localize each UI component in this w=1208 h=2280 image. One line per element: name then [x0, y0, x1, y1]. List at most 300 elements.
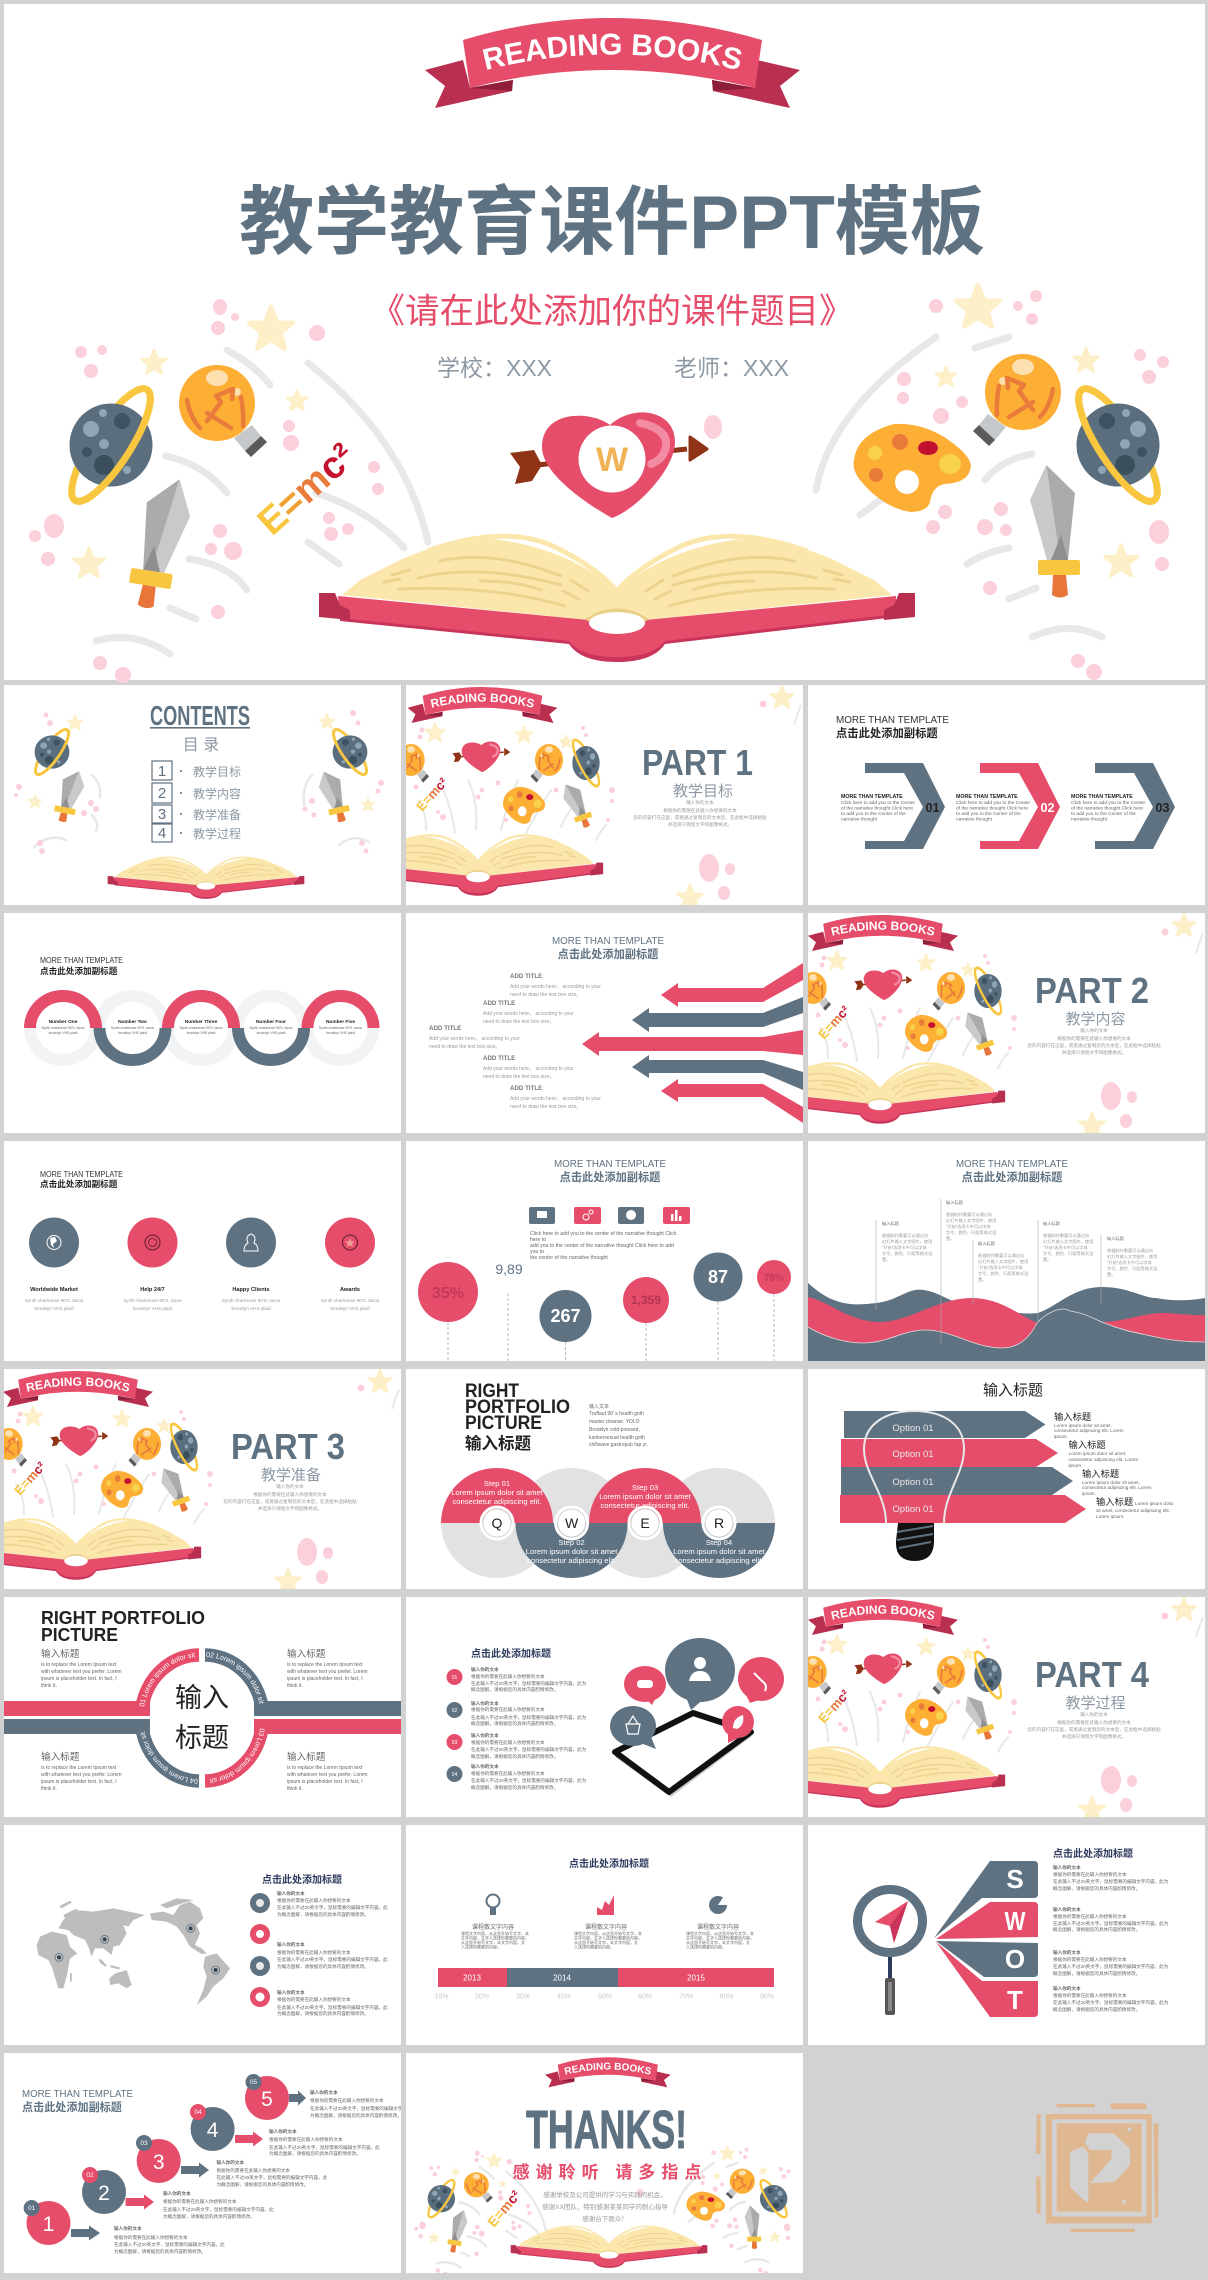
heading	[465, 1381, 570, 1453]
text block: bottom right: with whatever text you prefer. Lorem	[287, 1772, 368, 1778]
step text: 根据你的需要在此输入你想要的文本	[163, 2198, 237, 2205]
text block 2	[1068, 1439, 1138, 1468]
text block: Click here to add you to the center of the narrative thought Click	[530, 1231, 677, 1237]
ring labels: Number Three	[185, 1019, 218, 1025]
step text: 在此输入不过20英文字，鼠标需要的编辑文字内容。此	[114, 2241, 225, 2248]
heading: MORE THAN TEMPLATE	[40, 1170, 123, 1179]
step 1	[24, 2200, 100, 2245]
text block: bottom right: is to replace the Lorem Ipsum text	[287, 1765, 363, 1771]
letter badges	[481, 1507, 735, 1539]
letter badges: W	[565, 1515, 579, 1531]
text block 1	[882, 1220, 933, 1263]
SWOT wedge S	[934, 1861, 1038, 1938]
center title	[175, 1683, 229, 1753]
icon: book illustration	[353, 686, 801, 909]
text block: 输入文本	[589, 1403, 609, 1410]
text block 4: 置。	[1043, 1257, 1051, 1263]
text block 2: “开始”选项卡中可以字体	[946, 1223, 991, 1230]
heading: 点击此处添加副标题	[962, 1170, 1062, 1184]
labels: Happy Clients	[232, 1287, 270, 1293]
step text: 在此输入不过20英文字，鼠标需要的编辑文字内容。此	[216, 2174, 328, 2181]
heading: MORE THAN TEMPLATE	[22, 2088, 133, 2100]
ring labels: brooklyn VHS plaid	[257, 1031, 286, 1035]
arrows	[582, 963, 803, 1123]
text block	[1027, 1027, 1161, 1056]
heading: part 2: PART 2	[1035, 970, 1149, 1011]
text block: chillwave gastropub fap yr.	[589, 1442, 648, 1448]
list text: 在此输入不过20英文字，鼠标需要的编辑文字内容。此为	[1053, 1878, 1169, 1885]
ring labels: brooklyn VHS plaid	[118, 1031, 147, 1035]
text block: 输入你的文本	[686, 799, 714, 806]
list text: 根据你的需要在此输入你想要的文本	[1053, 1992, 1127, 1999]
heading: 点击此处添加副标题	[40, 1178, 118, 1189]
chevron 01: 01	[926, 800, 940, 815]
list: contents items: 3	[158, 806, 166, 823]
heading	[40, 1170, 123, 1189]
list badges: 01	[452, 1675, 457, 1681]
text block 3: 置。	[978, 1277, 986, 1283]
list text: 概念图解，请根据您的具体内容酌情修改。	[471, 1753, 558, 1760]
balloon: 35%	[418, 1262, 478, 1322]
icon: awards circle	[325, 1218, 375, 1268]
panel: part 2 slide	[808, 913, 1205, 1133]
text blocks: add title: Add your words here， according to your	[510, 984, 601, 990]
chevron 02: 02	[1040, 800, 1054, 815]
text block: the center of the narrative thought	[530, 1255, 608, 1261]
text block: 您的内容打在这里，或者通过复制您的文本后，在此框中选择粘贴	[633, 814, 767, 821]
axis labels: 40%	[557, 1994, 571, 2000]
balloon: 87: 87	[708, 1267, 728, 1287]
text block 2: ipsum.	[1068, 1463, 1082, 1468]
chevron 03: of the narrative thought Click here	[1071, 806, 1143, 812]
list text: 概念图解，请根据您的具体内容酌情修改。	[1053, 1926, 1140, 1933]
chart: timeline bar: 2015	[687, 1974, 705, 1982]
text block 1: 字号、颜色、行距等格式设	[882, 1250, 933, 1257]
balloon: 1,359: 1,359	[631, 1293, 661, 1307]
text block: bottom left	[41, 1751, 122, 1792]
heading: 点击此处添加标题	[1053, 1847, 1133, 1860]
step 5	[245, 2074, 306, 2120]
heading	[41, 1608, 205, 1645]
chevron 01: Click here to add you to the Center	[841, 800, 916, 806]
step text: Step 03	[632, 1483, 658, 1492]
text block 2: consectetur adipiscing elit. Lorem	[1068, 1457, 1138, 1462]
step text: 输入你的文本	[114, 2225, 142, 2232]
banner: ribbon: READING BOOKS	[831, 1605, 934, 1620]
step 3: 03	[140, 2140, 148, 2147]
center title: 标题	[175, 1723, 229, 1753]
subtitle: 《请在此处添加你的课件题目》	[370, 293, 854, 331]
labels: Awards	[340, 1287, 360, 1293]
text block: 并选择只保留文字和图像格式。	[258, 1505, 322, 1512]
letter badges: Q	[492, 1515, 503, 1531]
step 3: 3	[153, 2151, 165, 2174]
chart: four overlapping half circles	[441, 1468, 775, 1578]
list text: 输入你的文本	[471, 1666, 499, 1673]
text block: bottom right: 输入标题	[287, 1751, 326, 1763]
text blocks: add title: need to draw the text box size。	[510, 1104, 581, 1110]
icon: tablet	[615, 1713, 752, 1797]
step text	[114, 2089, 421, 2255]
text block 1: 输入标题	[1054, 1411, 1091, 1422]
text block 5: 根据制作需要可以通过向	[1107, 1247, 1153, 1254]
column text: 课程散文字内容	[472, 1923, 514, 1931]
ring labels: brooklyn VHS plaid	[187, 1031, 216, 1035]
text block 3: ipsum.	[1082, 1491, 1096, 1496]
list text: 输入你的文本	[277, 1989, 305, 1996]
icon circles	[250, 1893, 270, 2007]
list text: 根据你的需要在此输入你想要的文本	[471, 1673, 545, 1680]
text block: 根据你的需要在此输入你想要的文本	[663, 807, 737, 814]
panel: SWOT slide	[808, 1825, 1205, 2045]
text block 1: 根据制作需要可以通过向	[882, 1232, 928, 1239]
panel: balloons data slide	[406, 1141, 803, 1361]
list text: 输入你的文本	[1053, 1906, 1081, 1913]
chart: interlocking rings	[30, 996, 374, 1060]
text block: 并选择只保留文字和图像格式。	[1062, 1049, 1126, 1056]
text block: bottom right: think it.	[287, 1786, 303, 1792]
ring labels: 02 Lorem ipsum dolor sit	[206, 1652, 264, 1704]
text block 2: 根据制作需要可以通过向	[946, 1211, 992, 1218]
axis labels: 20%	[475, 1994, 489, 2000]
text block 4	[1043, 1220, 1094, 1263]
text block	[542, 2190, 668, 2223]
list text: 输入你的文本	[471, 1700, 499, 1707]
text block: top right: think it.	[287, 1683, 303, 1689]
panel: circle four sections slide	[4, 1597, 401, 1817]
panel: bulb options slide	[808, 1369, 1205, 1589]
column text: 课程文字内容，从这里开始写文字，本	[461, 1930, 529, 1936]
text block 1: consectetur adipiscing elit. Lorem	[1054, 1428, 1124, 1433]
labels: brooklyn VHS plaid	[34, 1306, 74, 1311]
SWOT wedge O	[936, 1941, 1038, 1977]
labels: brooklyn VHS plaid	[231, 1306, 271, 1311]
text blocks: add title: Add your words here， according to your	[510, 1096, 601, 1102]
list text: 概念图解，请根据您的具体内容酌情修改。	[1053, 2006, 1140, 2013]
heading: contents: CONTENTS	[150, 700, 250, 731]
heading: 点击此处添加副标题	[560, 1170, 660, 1184]
SWOT wedge W: W	[1004, 1906, 1026, 1936]
text block 4: Lorem ipsum dolor	[1135, 1501, 1174, 1506]
title: 教学教育课件PPT模板	[239, 180, 985, 264]
panel: part 4 slide	[808, 1597, 1205, 1817]
list text: 根据你的需要在此输入你想要的文本	[471, 1706, 545, 1713]
text block: bottom right: ipsum is placeholder text. In fact, I	[287, 1779, 363, 1785]
option labels: Option 01	[892, 1449, 934, 1460]
heading: MORE THAN TEMPLATE	[554, 1158, 666, 1170]
icon: heart with arrow	[510, 412, 707, 518]
list text: 根据你的需要在此输入你想要的文本	[277, 1897, 351, 1904]
banner: ribbon	[808, 1599, 958, 1635]
text block: 您的内容打在这里，或者通过复制您的文本后，在此框中选择粘贴	[1027, 1726, 1161, 1733]
text block	[633, 799, 767, 828]
heading: contents	[150, 706, 250, 729]
panel: contents slide	[4, 685, 401, 905]
chevron 02: narrative thought	[956, 816, 993, 822]
text block 3: Lorem ipsum dolor sit amet,	[1082, 1480, 1140, 1485]
panel: QWER steps slide	[406, 1369, 803, 1589]
text block 2: Lorem ipsum dolor sit amet,	[1068, 1451, 1126, 1456]
chevron 03: Click here to add you to the Center	[1071, 800, 1146, 806]
icon: watermark stamp	[1036, 2103, 1158, 2232]
step text: Step 02	[559, 1538, 585, 1547]
step text: 为概念图解，请根据您的具体内容酌情修改。	[163, 2213, 255, 2220]
icon: E=mc2 formula: E=mc²	[815, 1686, 853, 1726]
text blocks: add title: ADD TITLE	[510, 1085, 542, 1092]
heading: RIGHT PORTFOLIO	[41, 1608, 205, 1628]
ring labels: Number Five	[326, 1019, 355, 1025]
list text: 输入你的文本	[1053, 1864, 1081, 1871]
step text: Step 04	[706, 1538, 732, 1547]
text block: 感谢XX团队、特别感谢某某同学的耐心指导	[542, 2202, 668, 2211]
option labels: Option 01	[892, 1477, 934, 1488]
chart: timeline bar: 2013	[463, 1974, 481, 1982]
SWOT wedge T	[936, 1942, 1038, 2017]
heading: 点击此处添加副标题	[22, 2100, 122, 2114]
heading: MORE THAN TEMPLATE	[956, 1158, 1068, 1170]
text block 1: 幻灯片输入文字图片，使用	[882, 1238, 932, 1245]
axis labels: 10%	[434, 1994, 449, 2000]
subheading: 目 录	[183, 736, 219, 754]
text block 3: “开始”选项卡中可以字体	[978, 1264, 1023, 1271]
column text: 课程散文字内容	[697, 1923, 739, 1931]
labels: Synth chartreuse 90'S, tacos	[123, 1298, 182, 1303]
step text: 在此输入不过20英文字，鼠标需要的编辑文字内容。此	[163, 2206, 274, 2213]
list: contents items: 4	[158, 825, 166, 842]
text block: top left: is to replace the Lorem Ipsum text	[41, 1662, 117, 1668]
text block 3: 输入标题	[978, 1240, 996, 1247]
icon: open book	[319, 536, 915, 662]
heading: MORE THAN TEMPLATE	[552, 935, 664, 947]
column text: 文字内容，文字人选择你需要的内容，	[686, 1934, 754, 1940]
text block 4: sit amet, consectetur adipiscing elit.	[1096, 1508, 1170, 1513]
banner: ribbon: READING BOOKS	[430, 693, 534, 708]
chevron 03: 03	[1156, 800, 1170, 815]
column text: 课程文字内容，从这里开始写文字，本	[686, 1930, 754, 1936]
list text: 根据你的需要在此输入你想要的文本	[471, 1739, 545, 1746]
banner: ribbon: READING BOOKS	[26, 1377, 130, 1392]
column text: 从这里开始写文字，本文字内容，文	[686, 1939, 750, 1945]
list text: 概念图解，请根据您的具体内容酌情修改。	[471, 1686, 558, 1693]
heading: 输入标题	[465, 1433, 532, 1453]
list text: 概念图解，请根据您的具体内容酌情修改。	[471, 1720, 558, 1727]
subheading: 感谢聆听 请多指点	[513, 2162, 707, 2182]
labels: Synth chartreuse 90'S, tacos	[321, 1298, 380, 1303]
text block: 根据你的需要在此输入你想要的文本	[1057, 1035, 1131, 1042]
speech bubble: basket	[610, 1706, 656, 1749]
axis labels: 30%	[516, 1994, 530, 2000]
step text	[451, 1479, 766, 1565]
list text: 为概念图解，请根据您的具体内容酌情修改。	[277, 2010, 369, 2017]
heading	[22, 2088, 133, 2114]
chevron 01: to add you to the Center of the	[841, 811, 906, 817]
list: contents items: 教学目标	[193, 764, 241, 779]
text blocks: add title: Add your words here， according to your	[429, 1036, 520, 1042]
text block 3: 字号、颜色、行距等格式设	[978, 1270, 1029, 1277]
text block	[589, 1403, 648, 1448]
icon: pie	[709, 1896, 729, 1914]
balloon: 1,359	[623, 1277, 669, 1323]
text block 5: 输入标题	[1107, 1235, 1125, 1242]
list: contents items: 1	[158, 763, 166, 780]
text block 2: 字号、颜色、行距等格式设	[946, 1229, 997, 1236]
column text: 人选择你需要的内容。	[686, 1944, 726, 1950]
balloon: 35%: 35%	[432, 1285, 464, 1302]
text block 3: 幻灯片输入文字图片，使用	[978, 1258, 1028, 1265]
text block: 感谢台下观众！	[582, 2214, 628, 2223]
chevron 03: to add you to the Center of the	[1071, 811, 1136, 817]
step text: 根据你的需要在此输入你想要的文本	[269, 2136, 343, 2143]
step text: 为概念图解，请根据您的具体内容酌情修改。	[310, 2112, 402, 2119]
step 5: 05	[250, 2079, 257, 2086]
heading: PICTURE	[41, 1625, 118, 1645]
text block 3: consectetur adipiscing elit. Lorem	[1082, 1485, 1152, 1490]
step 4	[190, 2104, 263, 2151]
axis labels: 80%	[719, 1994, 734, 2000]
subheading: 教学准备	[261, 1467, 321, 1484]
speech bubble: plug	[738, 1657, 784, 1703]
panel: five arrows slide	[406, 913, 803, 1133]
step text: 输入你的文本	[269, 2128, 297, 2135]
text block 5: 幻灯片输入文字图片，使用	[1107, 1253, 1157, 1260]
SWOT wedge T: T	[1007, 1985, 1023, 2015]
text block: top left: think it.	[41, 1683, 57, 1689]
text blocks: add title: ADD TITLE	[510, 973, 542, 980]
list badges: 04	[452, 1772, 457, 1778]
chevron 01: of the narrative thought Click here	[841, 806, 913, 812]
list text: 在此输入不过20英文字，鼠标需要的编辑文字内容。此	[277, 1904, 388, 1911]
labels	[25, 1287, 380, 1311]
heading	[552, 937, 664, 960]
heading: MORE THAN TEMPLATE	[40, 956, 123, 965]
text block 5: 字号、颜色、行距等格式设	[1107, 1265, 1158, 1272]
chart: world map	[37, 1898, 230, 2005]
list text: 为概念图解，请根据您的具体内容酌情修改。	[277, 1911, 369, 1918]
teacher label: 老师：XXX	[674, 355, 789, 381]
list text: 输入你的文本	[471, 1732, 499, 1739]
option labels: Option 01	[892, 1504, 934, 1515]
text block: 输入你的文本	[1080, 1027, 1108, 1034]
text block 2: 幻灯片输入文字图片，使用	[946, 1217, 996, 1224]
list: contents items: 教学内容	[193, 786, 241, 801]
step 2: 02	[86, 2172, 94, 2179]
text block: top right: is to replace the Lorem Ipsum text	[287, 1662, 363, 1668]
text block: 并选择只保留文字和图像格式。	[668, 821, 732, 828]
list: contents items	[152, 761, 241, 842]
text block: bottom left: is to replace the Lorem Ipsum text	[41, 1765, 117, 1771]
labels: Synth chartreuse 90'S, tacos	[222, 1298, 281, 1303]
text block: lumbersexual health goth	[589, 1435, 645, 1441]
speech bubble: user	[665, 1638, 735, 1710]
ring labels: brooklyn VHS plaid	[49, 1031, 78, 1035]
text block: 输入你的文本	[276, 1483, 304, 1490]
step text: 输入你的文本	[163, 2190, 191, 2197]
list text: 输入你的文本	[1053, 1949, 1081, 1956]
chevron 02: MORE THAN TEMPLATE	[956, 794, 1018, 800]
text block: bottom left: with whatever text you prefer. Lorem	[41, 1772, 122, 1778]
list text: 为概念图解，请根据您的具体内容酌情修改。	[277, 1963, 369, 1970]
text block: Truffaut 90' s health goth	[589, 1411, 644, 1417]
text block: bottom left: ipsum is placeholder text. In fact, I	[41, 1779, 117, 1785]
text block 5: 置。	[1107, 1272, 1115, 1278]
icon: book illustration	[755, 914, 1203, 1137]
icon: bulb outline and base	[864, 1411, 964, 1561]
panel: world map slide	[4, 1825, 401, 2045]
heading	[40, 956, 123, 976]
text blocks: add title: ADD TITLE	[483, 1000, 515, 1007]
heading: 点击此处添加副标题	[836, 726, 938, 740]
text block: bottom left: think it.	[41, 1786, 57, 1792]
icon: E=mc2 formula: E=mc²	[484, 2187, 524, 2230]
chevron 03: narrative thought	[1071, 816, 1108, 822]
icon: book illustration	[0, 1370, 399, 1593]
text block: add you to the center of the narrative thought Click here to add	[530, 1243, 674, 1249]
list text: 概念图解，请根据您的具体内容酌情修改。	[471, 1784, 558, 1791]
number: 9,89: 9,89	[495, 1261, 523, 1277]
list: contents items: 教学准备	[193, 807, 241, 822]
text block: 并选择只保留文字和图像格式。	[1062, 1733, 1126, 1740]
column text: 文字内容，文字人选择你需要的内容，	[461, 1934, 529, 1940]
labels: Worldwide Market	[30, 1287, 78, 1293]
banner: ribbon	[408, 687, 558, 723]
text block 4: 输入标题	[1096, 1496, 1133, 1507]
text block 2	[946, 1199, 997, 1242]
speech bubble: game	[624, 1666, 666, 1705]
heading: PORTFOLIO	[465, 1397, 570, 1418]
list text: 输入你的文本	[277, 1890, 305, 1897]
center title: 输入	[175, 1683, 229, 1713]
icon: heart with arrow: W	[596, 441, 629, 479]
heading: 点击此处添加副标题	[40, 965, 118, 976]
heading: RIGHT	[465, 1381, 519, 1402]
step text: 输入你的文本	[216, 2159, 244, 2166]
icon: bulb	[486, 1894, 500, 1915]
text block 5: “开始”选项卡中可以字体	[1107, 1259, 1152, 1266]
text block: top left	[41, 1648, 122, 1689]
panel: waves slide	[808, 1141, 1205, 1361]
heading: thanks: THANKS!	[526, 2100, 687, 2160]
icon: globe circle	[29, 1218, 79, 1268]
arrow bars	[840, 1411, 1086, 1523]
axis labels: 70%	[679, 1994, 693, 2000]
icon: open book	[511, 2226, 707, 2268]
SWOT wedge O: O	[1005, 1944, 1025, 1974]
step text: 为概念图解，请根据您的具体内容酌情修改。	[269, 2150, 361, 2157]
ring labels: Synth chartreuse 90'S, tacos	[249, 1026, 293, 1030]
chevron 02: Click here to add you to the Center	[956, 800, 1031, 806]
SWOT wedge W	[936, 1902, 1038, 1939]
panel: three chevrons slide	[808, 685, 1205, 905]
text blocks: add title: Add your words here， according to your	[483, 1011, 574, 1017]
list: contents items: 教学过程	[193, 826, 241, 841]
panel: timeline slide	[406, 1825, 803, 2045]
icon: E=mc2 formula: E=mc²	[11, 1458, 49, 1498]
list text: 根据你的需要在此输入你想要的文本	[1053, 1871, 1127, 1878]
text block 4: Lorem ipsum.	[1096, 1514, 1124, 1519]
subheading: 教学过程	[1065, 1695, 1126, 1712]
list: contents items: 2	[158, 785, 166, 802]
step 1: 01	[28, 2205, 36, 2212]
bands	[4, 1701, 401, 1734]
step text: 为概念图解，请根据您的具体内容酌情修改。	[216, 2181, 308, 2188]
ring labels: Synth chartreuse 90'S, tacos	[179, 1026, 223, 1030]
step text: consectetur adipiscing elit.	[674, 1556, 764, 1565]
speech bubble: leaf	[722, 1706, 754, 1743]
panel: part 1 slide	[406, 685, 803, 905]
text block 1: 输入标题	[882, 1220, 900, 1227]
text block: you to	[530, 1249, 544, 1255]
text block 4: 输入标题	[1043, 1220, 1061, 1227]
